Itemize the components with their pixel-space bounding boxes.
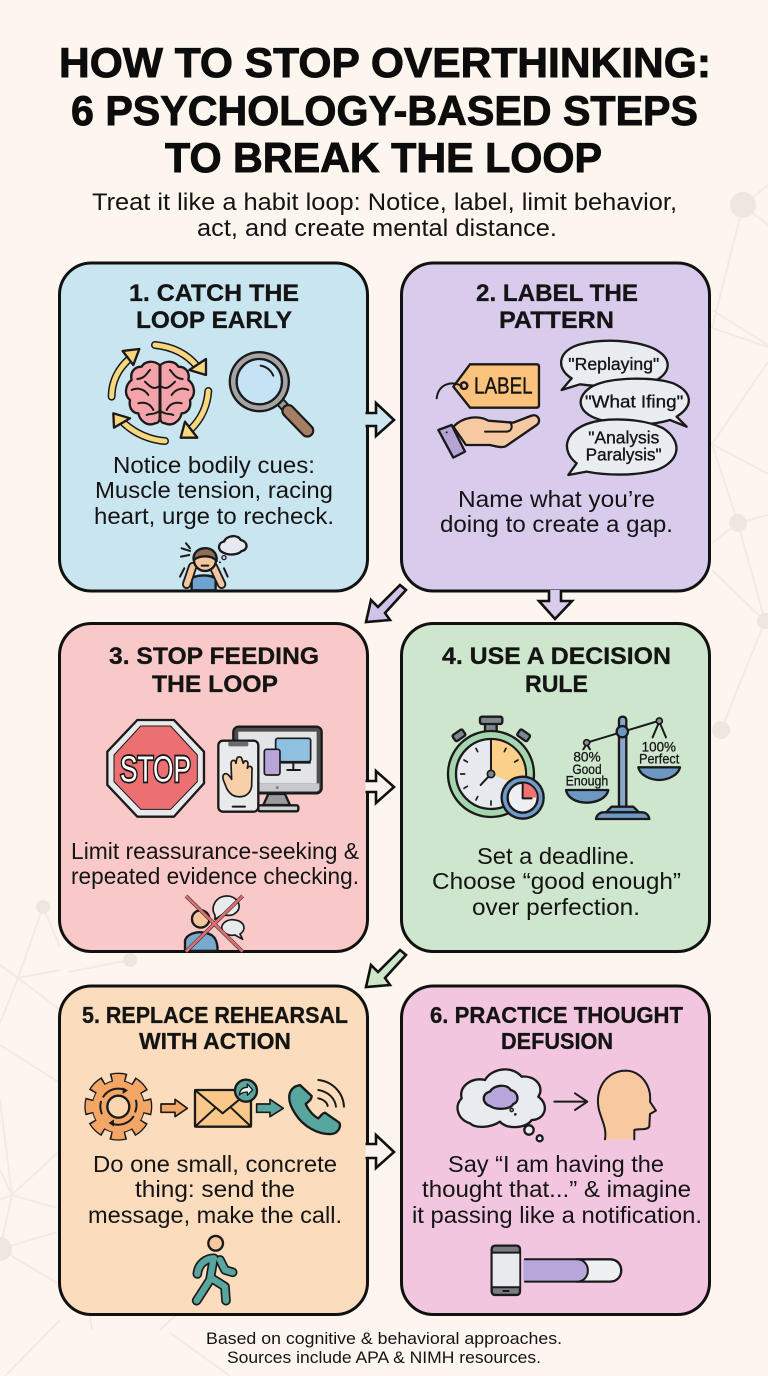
panel: step 6 practice thought defusion <box>402 986 710 1314</box>
heading: step 4: 4. USE A DECISION <box>442 643 671 670</box>
icon: balance scale 80% good enough vs 100% perfect: Enough <box>566 774 608 789</box>
footer: sources: Based on cognitive & behavioral approaches. <box>206 1330 562 1348</box>
arrow: envelope to phone <box>257 1099 283 1117</box>
body text: step 6 <box>412 1151 702 1228</box>
body text: step 4: Choose “good enough” <box>432 868 681 894</box>
title: 6 PSYCHOLOGY-BASED STEPS <box>71 87 698 134</box>
icon: envelope with send badge <box>195 1080 257 1127</box>
panel: step 4 use a decision rule <box>402 624 710 952</box>
body text: step 3 <box>71 838 359 889</box>
icon: stressed person with thought cloud <box>180 536 247 590</box>
body text: step 6: thought that...” & imagine <box>422 1176 691 1202</box>
icon: person with crossed-out chat bubbles <box>185 896 244 952</box>
arrow: step 2 to step 3 <box>366 585 406 622</box>
icon: balance scale 80% good enough vs 100% perfect: 100% <box>642 740 676 755</box>
panel: step 2 label the pattern <box>402 263 710 591</box>
icon: phone with notification sliding away <box>492 1246 621 1295</box>
heading: step 6: DEFUSION <box>501 1028 613 1054</box>
heading: step 2: 2. LABEL THE <box>476 280 638 307</box>
heading: step 5 <box>82 1002 348 1054</box>
title <box>59 39 711 181</box>
title: TO BREAK THE LOOP <box>165 134 602 181</box>
subtitle: Treat it like a habit loop: Notice, label, limit behavior, <box>92 189 677 216</box>
heading: step 3: THE LOOP <box>152 671 278 698</box>
body text: step 4: Set a deadline. <box>477 843 635 869</box>
icon: brain with loop arrows <box>112 345 208 441</box>
icon: balance scale 80% good enough vs 100% perfect: 80% <box>573 750 601 765</box>
arrow: step 4 to step 5 <box>366 950 406 987</box>
body text: step 5: thing: send the <box>135 1176 295 1202</box>
icon: speech bubbles with thought labels: Paralysis" <box>586 445 662 465</box>
heading: step 4 <box>442 643 671 698</box>
body text: step 1: Notice bodily cues: <box>113 452 315 478</box>
icon: balance scale 80% good enough vs 100% perfect: Good <box>572 762 602 777</box>
panel: step 3 stop feeding the loop <box>60 624 368 952</box>
icon: walking person <box>197 1236 233 1301</box>
heading: step 1: 1. CATCH THE <box>129 280 299 307</box>
icon: thought cloud arrow to head <box>458 1069 656 1141</box>
title: HOW TO STOP OVERTHINKING: <box>59 39 711 86</box>
body text: step 2: doing to create a gap. <box>440 511 673 537</box>
heading: step 1: LOOP EARLY <box>136 307 292 334</box>
body text: step 6: it passing like a notification. <box>412 1202 702 1228</box>
body text: step 3: repeated evidence checking. <box>71 863 359 889</box>
body text: step 5: Do one small, concrete <box>93 1151 337 1177</box>
body text: step 5: message, make the call. <box>88 1202 342 1228</box>
subtitle: act, and create mental distance. <box>197 215 557 242</box>
body text: step 2: Name what you’re <box>458 486 655 512</box>
heading: step 5: WITH ACTION <box>139 1028 291 1054</box>
arrow: step 3 to step 4 <box>366 771 394 803</box>
heading: step 1 <box>129 280 299 334</box>
heading: step 3: 3. STOP FEEDING <box>109 643 319 670</box>
heading: step 2 <box>476 280 638 334</box>
icon: devices with stop hand <box>218 727 322 812</box>
icon: label tag on open hand: LABEL <box>474 373 533 399</box>
body text: step 4 <box>432 843 681 920</box>
icon: balance scale 80% good enough vs 100% perfect <box>566 717 680 819</box>
body text: step 1 <box>94 452 334 529</box>
panel: step 5 replace rehearsal with action <box>60 986 368 1314</box>
icon: speech bubbles with thought labels: "What Ifing" <box>585 392 683 412</box>
icon: speech bubbles with thought labels: "Replaying" <box>568 354 659 374</box>
heading: step 6: 6. PRACTICE THOUGHT <box>430 1002 683 1028</box>
body text: step 4: over perfection. <box>472 894 640 920</box>
subtitle <box>92 189 677 242</box>
icon: stop sign: STOP <box>120 748 191 789</box>
heading: step 2: PATTERN <box>499 307 614 334</box>
icon: balance scale 80% good enough vs 100% perfect: Perfect <box>639 751 679 766</box>
body text: step 6: Say “I am having the <box>448 1151 664 1177</box>
icon: speech bubbles with thought labels <box>561 341 689 475</box>
body text: step 3: Limit reassurance-seeking & <box>71 838 359 864</box>
icon: gear to envelope to phone sequence <box>89 1078 344 1136</box>
body text: step 5 <box>88 1151 342 1228</box>
icon: stop sign <box>107 720 204 817</box>
icon: gear <box>89 1078 147 1136</box>
arrow: step 5 to step 6 <box>366 1135 394 1168</box>
arrow: step 1 to step 2 <box>366 403 394 436</box>
icon: speech bubbles with thought labels: "Analysis <box>588 427 660 447</box>
icon: phone with signal <box>289 1080 344 1134</box>
heading: step 5: 5. REPLACE REHEARSAL <box>82 1002 348 1028</box>
footer: sources: Sources include APA & NIMH resources. <box>227 1349 541 1367</box>
heading: step 4: RULE <box>525 671 588 698</box>
footer: sources <box>206 1330 562 1367</box>
heading: step 6 <box>430 1002 683 1054</box>
icon: label tag on open hand <box>437 364 539 458</box>
icon: magnifying glass <box>229 351 307 431</box>
body text: step 1: Muscle tension, racing <box>95 477 333 503</box>
arrow: step 2 to step 4 <box>539 590 572 619</box>
panel: step 1 catch the loop early <box>60 263 368 591</box>
body text: step 2 <box>440 486 673 537</box>
body text: step 1: heart, urge to recheck. <box>94 503 334 529</box>
heading: step 3 <box>109 643 319 698</box>
arrow: gear to envelope <box>161 1099 187 1117</box>
icon: stopwatch with small clock <box>448 717 544 819</box>
